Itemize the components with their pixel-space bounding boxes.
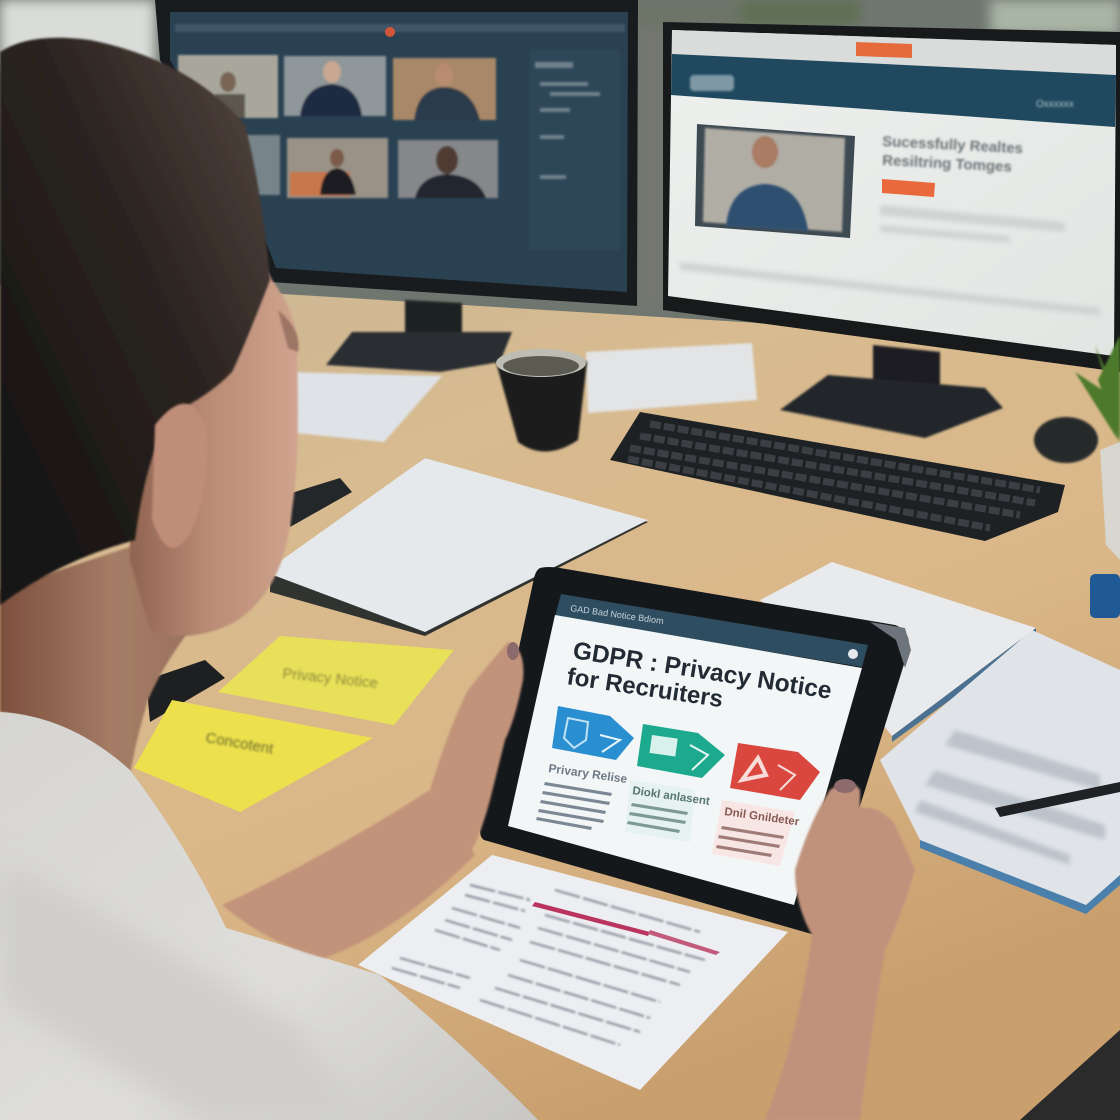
screen page: [508, 615, 862, 905]
screen: [668, 30, 1116, 356]
sticky note: privacy notice: Privacy Notice: [282, 665, 379, 692]
sticky note: consent: Concotent: [204, 729, 275, 758]
stand: [780, 345, 1003, 438]
screen header: [555, 594, 868, 667]
blue arrow card: Privary Relise: [548, 761, 628, 786]
right monitor: [663, 22, 1120, 438]
stand: [326, 300, 512, 372]
blurred heading: Sucessfully Realtes: [882, 133, 1023, 157]
tablet heading: for Recruiters: [565, 663, 725, 713]
screen: [170, 12, 628, 292]
phone: [146, 660, 225, 722]
video tile grid: [178, 55, 498, 198]
browser bar: [672, 30, 1116, 75]
body: [480, 567, 909, 935]
mouse and plant: [1034, 335, 1120, 618]
tablet: GAD Bad Notice Bdiom: [570, 603, 664, 626]
green arrow card: Diokl anlasent: [632, 785, 711, 808]
right monitor: Resiltring Tomges: [882, 152, 1012, 176]
tablet heading: GDPR : Privacy Notice: [571, 637, 834, 705]
sticky note: consent: [134, 700, 373, 812]
left arm: [222, 790, 475, 958]
keyboard: [610, 412, 1065, 541]
text lines: [680, 205, 1100, 316]
background wall: [0, 0, 1120, 330]
document under tablet: [358, 855, 788, 1090]
left monitor: [155, 0, 638, 372]
frame: [663, 22, 1120, 372]
person: hair: [0, 38, 270, 605]
tablet: [480, 567, 911, 935]
red arrow card: Dnil Gnildeter: [724, 806, 800, 829]
sidebar text lines: [535, 62, 600, 179]
person: shirt: [0, 712, 538, 1120]
pen: [995, 782, 1120, 817]
frame: [155, 0, 638, 306]
red arrow card: [712, 743, 820, 866]
papers behind on the desk: [285, 343, 757, 442]
person: ear: [152, 404, 207, 548]
top toolbar: [175, 24, 625, 32]
eye socket shadow: [278, 310, 299, 352]
header band: [671, 54, 1116, 127]
right stack of documents: [760, 562, 1120, 914]
desk surface: [0, 285, 1120, 1120]
video still: [695, 124, 855, 238]
coffee mug: [496, 349, 587, 452]
notebook on desk: [265, 458, 648, 636]
right monitor: Oxxxxxx: [1036, 99, 1074, 110]
sticky note: privacy notice: [218, 636, 454, 725]
dark floor corner: [1020, 1030, 1120, 1120]
person: face: [130, 199, 298, 636]
green arrow card: [625, 724, 725, 842]
left hand: [430, 642, 523, 860]
person: neck: [0, 540, 205, 775]
blue arrow card: [536, 706, 634, 830]
right hand and forearm: [765, 782, 915, 1120]
